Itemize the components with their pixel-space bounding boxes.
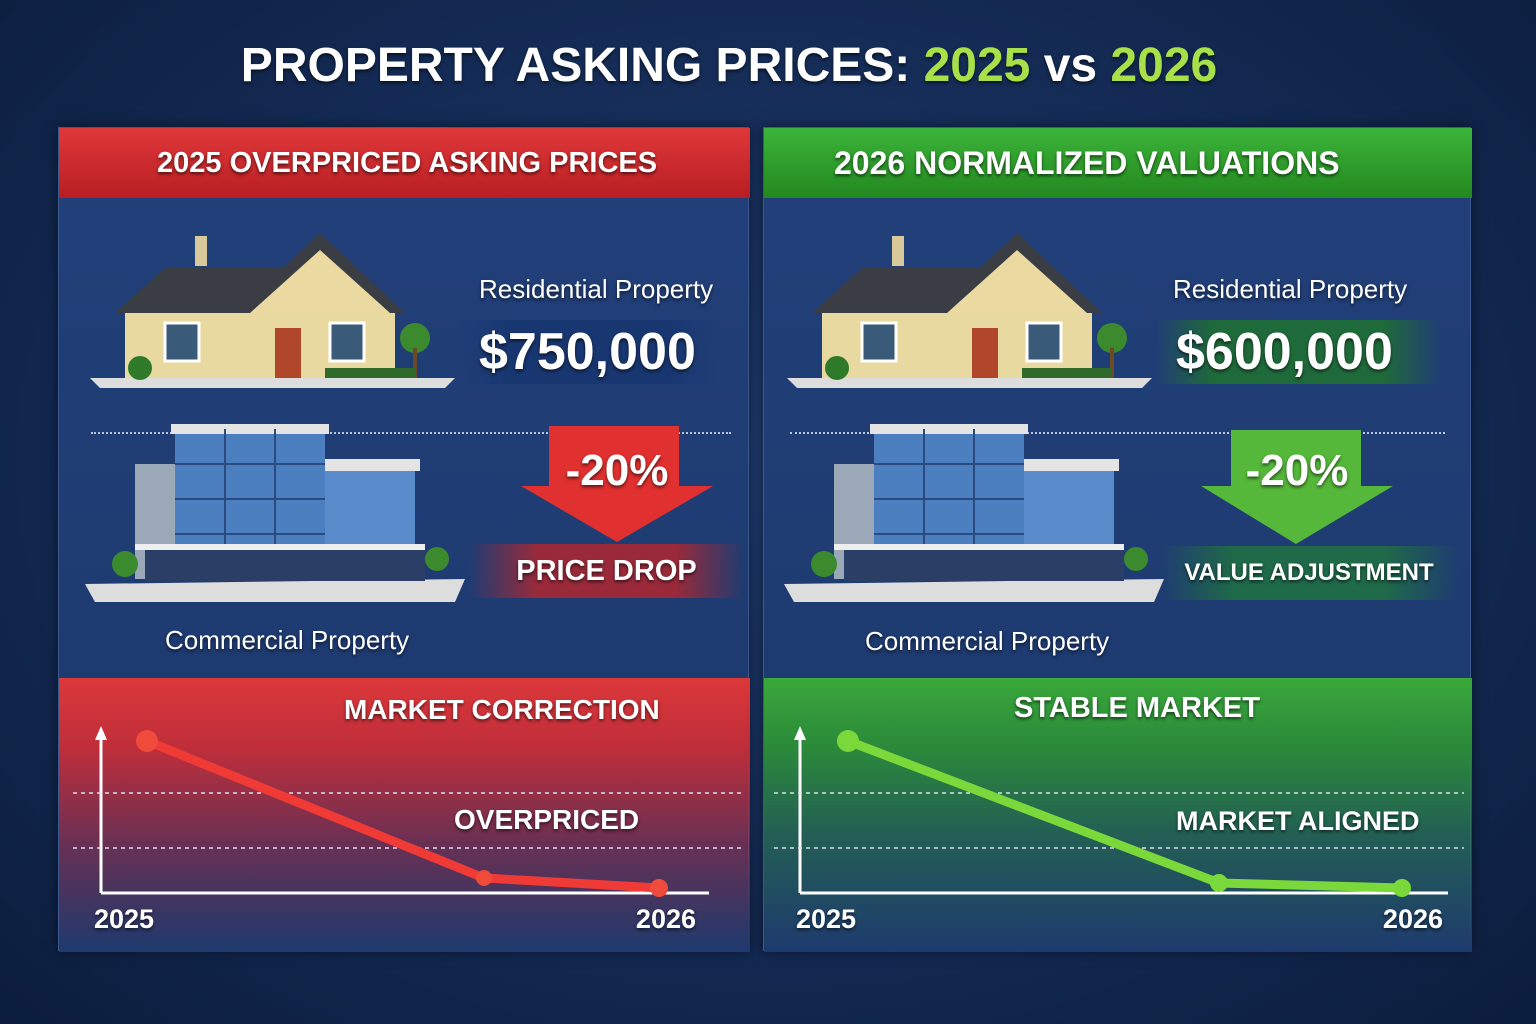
value: $750,000: $750,000 [479, 323, 696, 381]
arrow: -20% red [521, 426, 713, 542]
label: price drop [469, 544, 744, 598]
label: value adjustment [1159, 546, 1459, 600]
icon: office building [85, 424, 465, 602]
label: market aligned: MARKET ALIGNED [1176, 806, 1420, 836]
value: $600,000: $600,000 [1176, 323, 1393, 381]
header: 2025 overpriced [59, 128, 750, 198]
header: 2026 normalized: 2026 NORMALIZED VALUATIONS [834, 145, 1340, 181]
icon: house [90, 233, 455, 388]
icon: office building [784, 424, 1164, 602]
heading: stable market: STABLE MARKET [1014, 692, 1260, 724]
heading: market correction: MARKET CORRECTION [344, 694, 660, 725]
panel: 2025 [58, 127, 749, 951]
label: value adjustment: VALUE ADJUSTMENT [1184, 559, 1434, 586]
axis labels: 2026 [1383, 904, 1443, 934]
axis labels: 2026 [636, 904, 696, 934]
arrow: -20% green [1201, 430, 1393, 544]
chart: market correction [59, 678, 750, 952]
header: 2025 overpriced: 2025 OVERPRICED ASKING PRICES [157, 147, 657, 179]
label: residential property: Residential Property [479, 274, 713, 304]
label: residential property: Residential Property [1173, 274, 1407, 304]
arrow: -20% red: -20% [566, 446, 668, 495]
axis labels: 2025 [94, 904, 154, 934]
label: commercial property: Commercial Property [865, 626, 1109, 656]
panel: 2026 [763, 127, 1471, 951]
label: overpriced: OVERPRICED [454, 804, 639, 835]
value: $600,000 [1156, 320, 1441, 384]
label: commercial property: Commercial Property [165, 625, 409, 655]
icon: house [787, 233, 1152, 388]
label: price drop: PRICE DROP [516, 555, 697, 587]
title: PROPERTY ASKING PRICES: 2025 vs 2026 [241, 39, 1217, 92]
axis labels [94, 904, 696, 934]
arrow: -20% green: -20% [1246, 446, 1348, 495]
header: 2026 normalized [764, 128, 1472, 198]
axis labels [796, 904, 1444, 934]
chart: stable market [764, 678, 1472, 952]
axis labels: 2025 [796, 904, 856, 934]
